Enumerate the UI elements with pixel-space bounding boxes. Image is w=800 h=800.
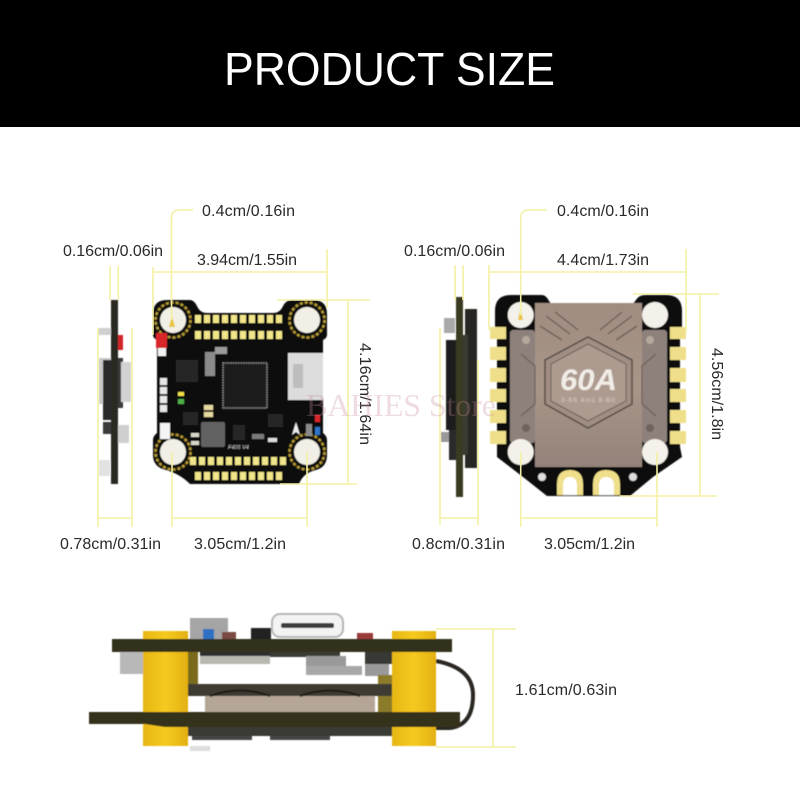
mounting holes [508, 302, 668, 465]
dimension labels: 4.56cm/1.8in [708, 348, 725, 440]
dimension labels: 3.94cm/1.55in [197, 252, 297, 269]
yellow standoffs [143, 631, 436, 746]
panel: stack height view [89, 614, 617, 751]
solder pads [190, 315, 286, 480]
dimension labels: 0.4cm/0.16in [202, 203, 295, 220]
flight controller board [153, 300, 327, 484]
dimension lines [440, 210, 719, 527]
watermark: BAHIES Store [306, 387, 496, 423]
panel: flight controller dimensions [60, 203, 373, 553]
power pads [538, 470, 637, 495]
side view of ESC [441, 297, 477, 497]
dimension labels: 0.16cm/0.06in [63, 243, 163, 260]
dimension labels: 0.16cm/0.06in [404, 243, 505, 260]
dimension lines [436, 629, 516, 747]
title: PRODUCT SIZE [224, 43, 555, 95]
dimension labels: 0.4cm/0.16in [557, 203, 649, 220]
dimension labels: 0.8cm/0.31in [412, 536, 505, 553]
dimension labels: 3.05cm/1.2in [194, 536, 286, 553]
bottom board [89, 712, 460, 727]
dimension label: 1.61cm/0.63in [515, 682, 617, 699]
hexagon badge [545, 337, 632, 428]
hexagon badge: 60A [560, 364, 617, 397]
stack internals [120, 614, 396, 751]
dimension labels: 4.4cm/1.73in [557, 252, 649, 269]
copper plate [510, 303, 667, 467]
mounting holes [156, 302, 324, 470]
panel: ESC dimensions [404, 203, 725, 553]
stack assembly [89, 614, 473, 751]
dimension labels: 0.78cm/0.31in [60, 536, 161, 553]
components [156, 333, 323, 451]
header band [0, 0, 800, 127]
dimension labels [404, 203, 725, 553]
top board [112, 639, 452, 652]
dimension lines [98, 210, 370, 527]
ESC board [490, 295, 686, 496]
motor pads [490, 327, 686, 444]
dimension labels: 4.16cm/1.64in [356, 343, 373, 445]
cable loop [436, 661, 473, 728]
dimension labels: 3.05cm/1.2in [544, 536, 635, 553]
dimension labels [60, 203, 373, 553]
components: F405 V4 [228, 445, 249, 451]
hexagon badge: 3-6S 4in1 8-Bit [561, 397, 615, 404]
side view of flight controller [98, 300, 131, 484]
